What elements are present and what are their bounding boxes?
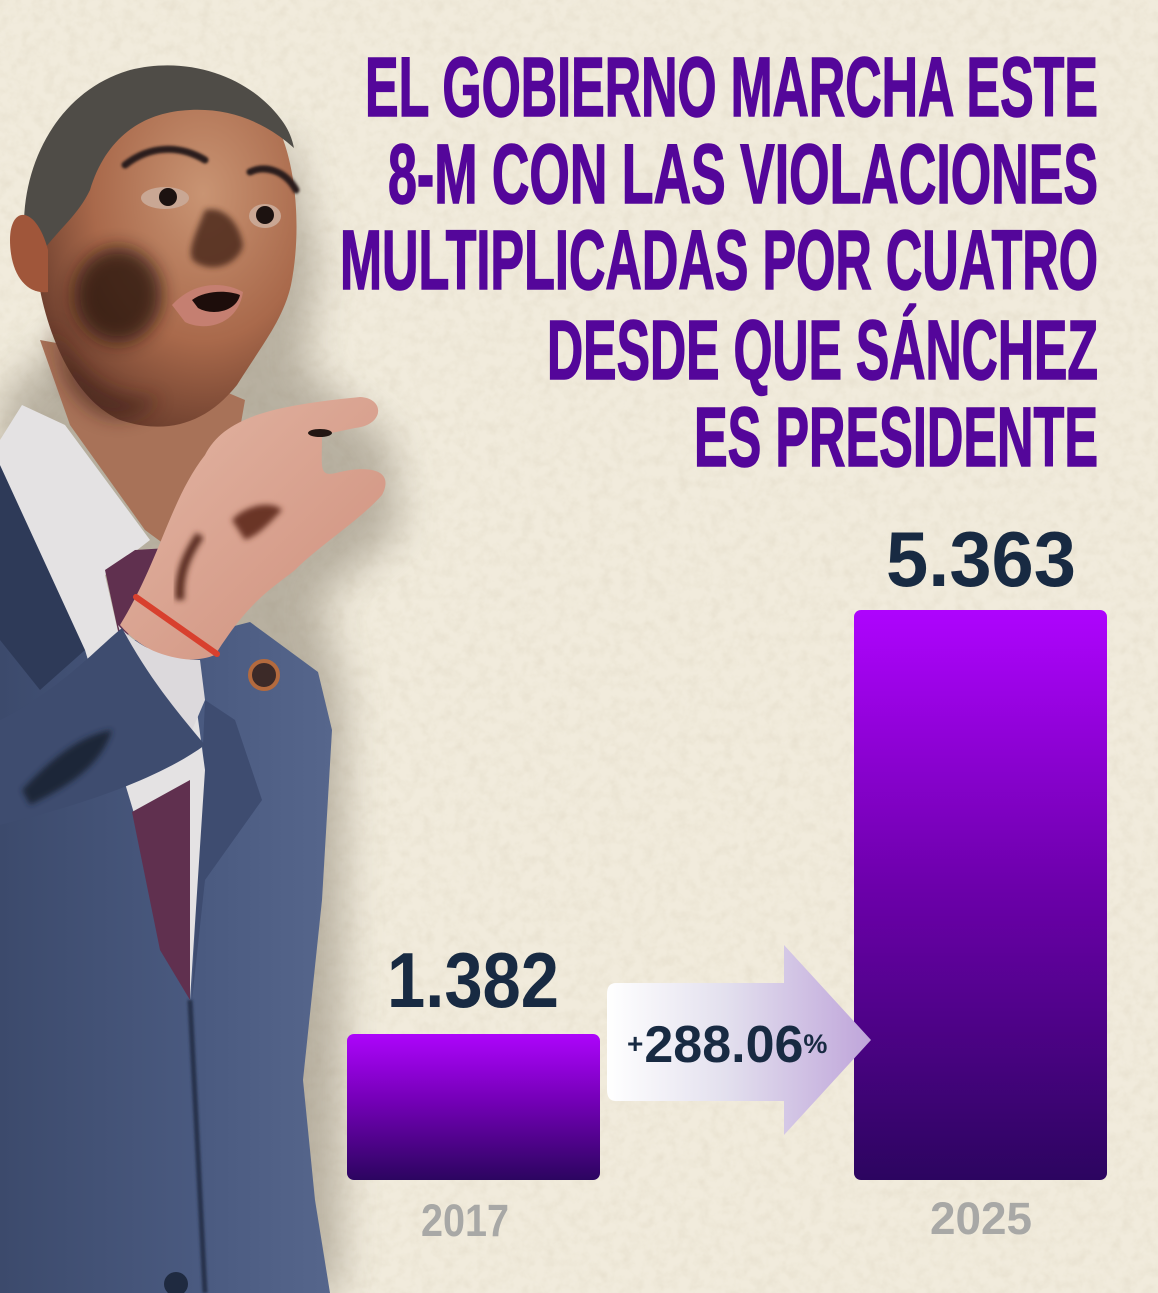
neck: [40, 340, 245, 547]
title: [340, 40, 1098, 484]
nose: [191, 209, 243, 267]
jacket button: [164, 1272, 188, 1293]
shirt collar: [0, 405, 205, 1000]
label 2025: 2025: [930, 1193, 1032, 1244]
growth percentage: %: [803, 1029, 827, 1059]
mouth: [172, 285, 243, 326]
sleeve dark fold: [22, 730, 112, 805]
cheek shadow: [74, 247, 162, 343]
growth percentage: 288.06: [644, 1016, 803, 1074]
value 2025: 5.363: [886, 515, 1076, 603]
label 2017: 2017: [421, 1195, 509, 1246]
bar 2017: [347, 1034, 600, 1180]
lapel pin: [250, 661, 278, 689]
suit jacket: [0, 465, 332, 1293]
jaw shadow: [50, 320, 160, 419]
bar 2025: [854, 610, 1107, 1180]
left lapel shadow: [0, 465, 85, 690]
ear: [10, 215, 48, 292]
sleeve: [0, 628, 205, 825]
growth percentage: +: [627, 1028, 643, 1059]
necktie: [105, 548, 190, 1000]
hair: [24, 65, 294, 252]
bar chart: [347, 515, 1107, 1246]
brows: [125, 149, 296, 190]
right lapel: [192, 700, 262, 1000]
photo: man in suit gesturing: [0, 65, 386, 1293]
head: [30, 69, 297, 427]
eyes: [141, 187, 281, 228]
shirt cuff: [118, 625, 205, 735]
jacket seam: [190, 1000, 205, 1293]
growth arrow: [607, 945, 871, 1135]
person shadow: [0, 130, 400, 1293]
hand with pinching fingers: [120, 397, 386, 660]
value 2017: 1.382: [387, 936, 559, 1024]
red wristband: [136, 597, 217, 654]
